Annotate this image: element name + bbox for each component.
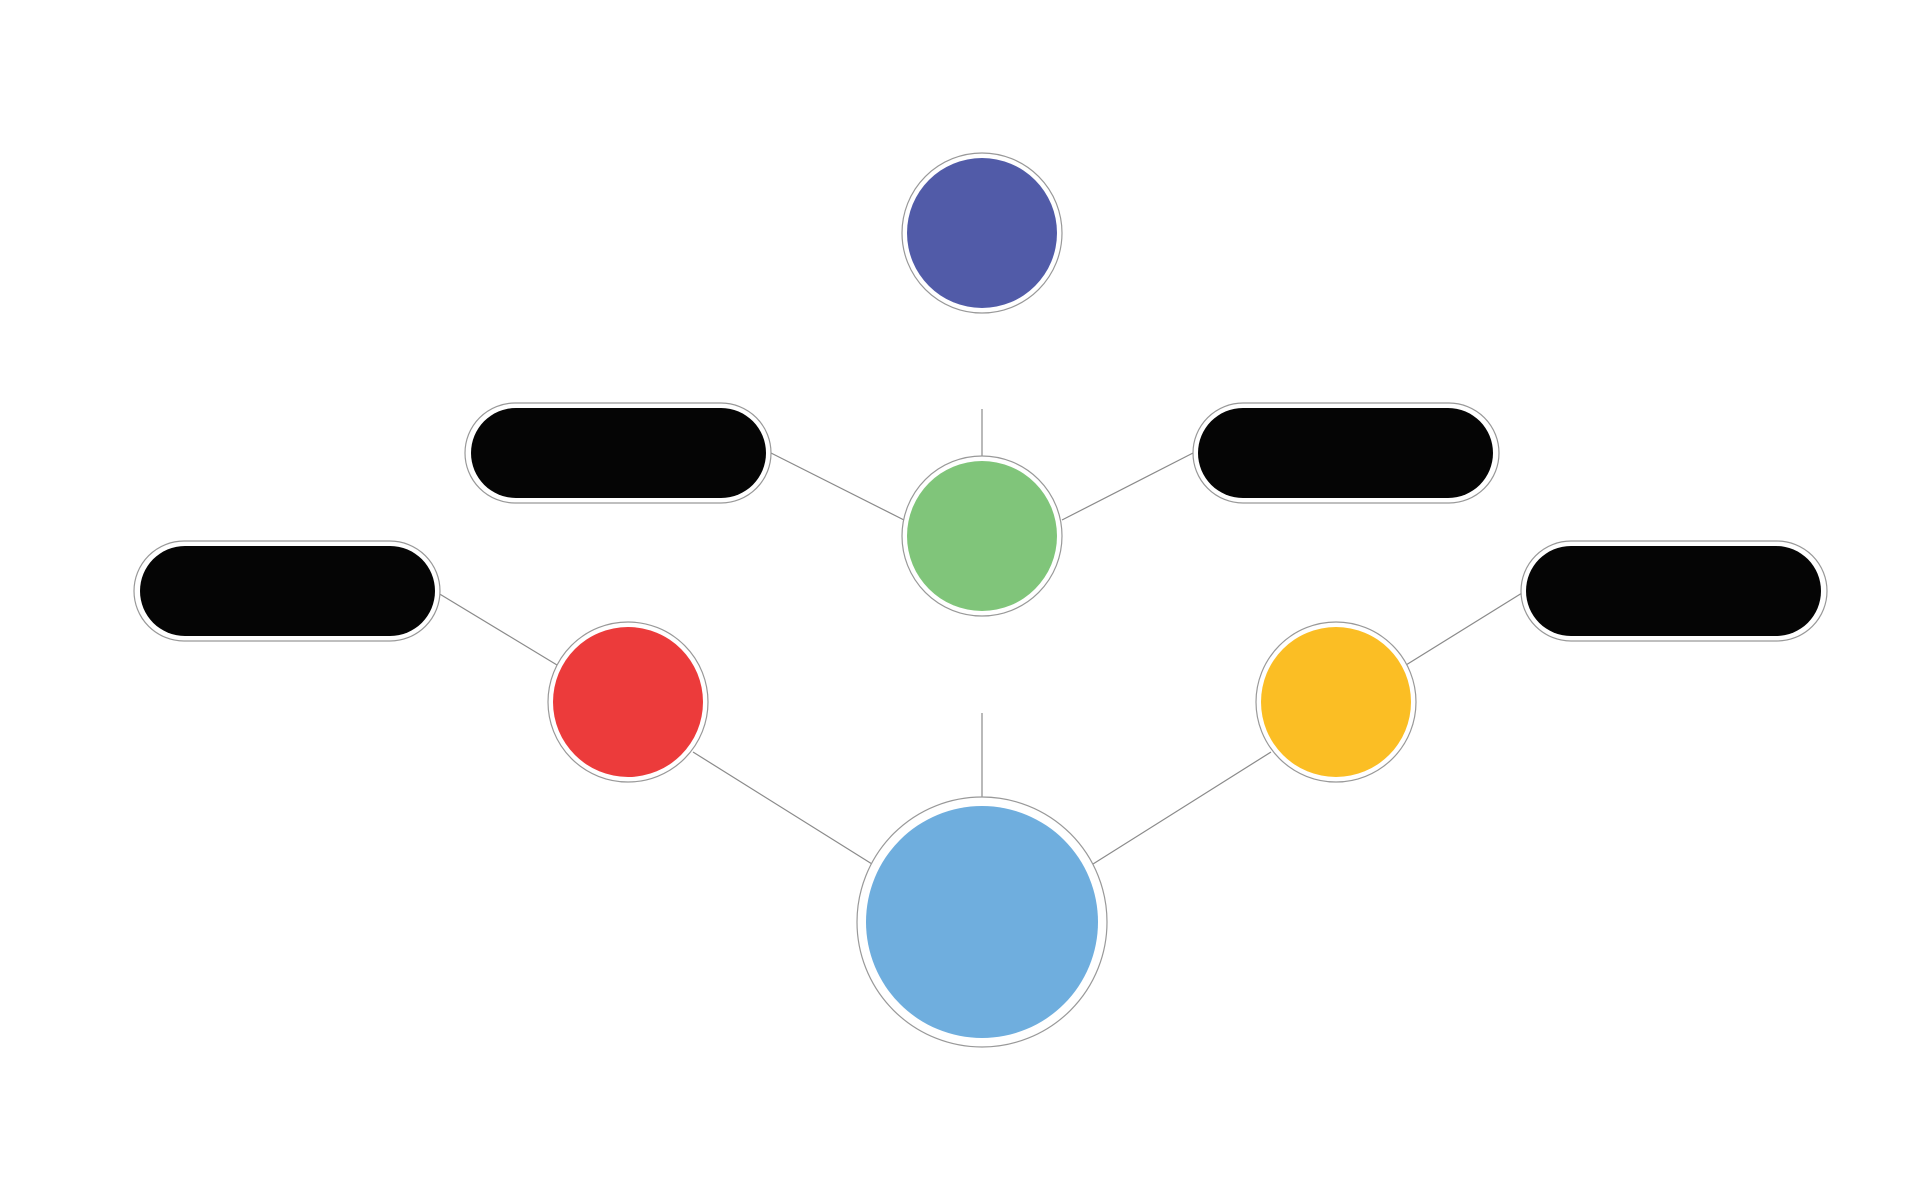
circle: big blue <box>857 797 1107 1047</box>
circle: red <box>548 622 708 782</box>
circle: green <box>902 456 1062 616</box>
pill: bottom right <box>1521 541 1827 641</box>
pill: top left <box>465 403 771 503</box>
circle: yellow <box>1256 622 1416 782</box>
pill: top right <box>1193 403 1499 503</box>
pill: bottom left <box>134 541 440 641</box>
circle: top purple <box>902 153 1062 313</box>
